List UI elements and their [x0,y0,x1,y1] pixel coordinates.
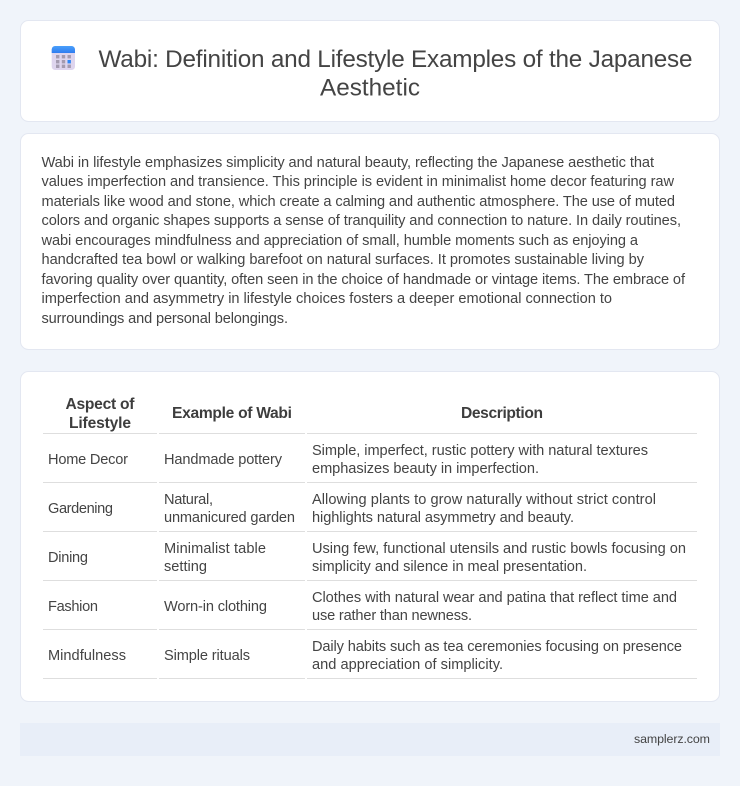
text block: introduction: colors and organic shapes supports a sense of tranquility and connection to nature. In daily routines, [42,213,681,229]
table row: Dining: Using few, functional utensils and rustic bowls focusing on [312,541,686,557]
table row: Mindfulness: Mindfulness [48,648,126,664]
table row: Gardening: unmanicured garden [164,510,295,526]
table row: Dining: Dining [48,550,88,566]
table row: Mindfulness: Daily habits such as tea ceremonies focusing on presence [312,639,682,655]
text block: introduction: favoring quality over quantity, often seen in the choice of handmade or vintage items. The embrace of [42,272,686,288]
text block: introduction: handcrafted tea bowl or walking barefoot on natural surfaces. It promotes sustainable living by [42,252,645,268]
panel: lifestyle table [20,372,720,702]
text block: introduction: values imperfection and transience. This principle is evident in minimalist home decor featuring raw [42,174,674,190]
title: Aesthetic [320,74,420,102]
table row: Dining: simplicity and silence in meal presentation. [312,559,587,575]
table header: Lifestyle [69,415,131,432]
table row: Mindfulness [48,639,682,673]
table row: Fashion: Clothes with natural wear and patina that reflect time and [312,590,677,606]
table row: Home Decor: emphasizes beauty in imperfection. [312,461,539,477]
table row: Fashion: use rather than newness. [312,608,472,624]
table header: Description [461,405,543,422]
text block: introduction: imperfection and asymmetry in lifestyle choices fosters a deeper emotional connection to [42,291,612,307]
table row: Fashion: Worn-in clothing [164,599,267,615]
table row: Gardening: Gardening [48,501,113,517]
table row: Home Decor: Handmade pottery [164,452,283,468]
table row: Home Decor [48,443,648,477]
table row: Mindfulness: and appreciation of simplicity. [312,657,503,673]
panel: introduction text [20,134,720,350]
table row: Gardening: Natural, [164,492,213,508]
table header [66,396,543,432]
title [98,46,692,102]
text block: introduction: Wabi in lifestyle emphasizes simplicity and natural beauty, reflecting the Japanese aesthetic that [42,155,654,171]
text block: introduction [40,155,686,327]
table row: Home Decor: Home Decor [48,452,128,468]
table row: Mindfulness: Simple rituals [164,648,250,664]
table row: Dining: setting [164,559,207,575]
table row: Gardening: highlights natural asymmetry and beauty. [312,510,574,526]
icon: calendar [52,46,75,70]
table row: Gardening: Allowing plants to grow naturally without strict control [312,492,656,508]
table header: Aspect of [66,396,135,413]
table rules [43,433,697,679]
table header: Example of Wabi [172,405,292,422]
table row: Home Decor: Simple, imperfect, rustic pottery with natural textures [312,443,648,459]
panel: title header [20,20,720,122]
footer source text: samplerz.com [634,732,710,746]
table row: Fashion: Fashion [48,599,98,615]
table row: Dining [48,541,686,575]
title: Wabi: Definition and Lifestyle Examples of the Japanese [98,46,692,73]
table row: Dining: Minimalist table [164,541,266,557]
text block: introduction: surroundings and personal belongings. [42,311,288,327]
text block: introduction: materials like wood and stone, which create a calming and authentic atmosphere. The use of muted [42,194,675,210]
footer bar [20,723,720,756]
table row: Gardening [48,492,656,526]
table row: Fashion [48,590,677,624]
text block: introduction: wabi encourages mindfulness and appreciation of small, humble moments such as enjoying a [40,233,639,249]
